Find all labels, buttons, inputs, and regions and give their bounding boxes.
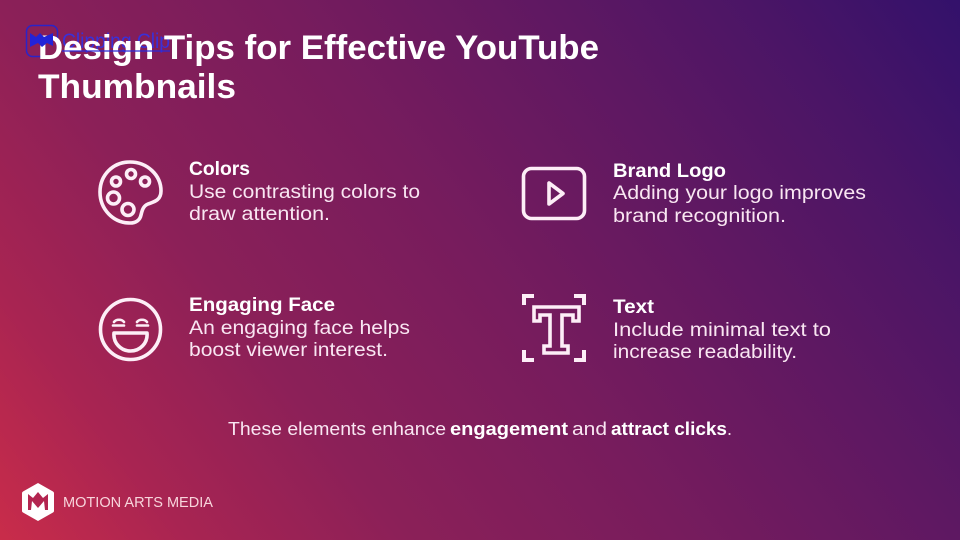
title: Thumbnails [38, 68, 236, 106]
text: colors: draw attention. [189, 204, 330, 225]
title [38, 29, 599, 106]
icon: hexagon crown [22, 483, 54, 521]
text: text [613, 297, 831, 363]
blue overlay logo link [26, 26, 170, 56]
text: brand logo: brand recognition. [613, 206, 786, 227]
closing statement: These elements enhance [228, 419, 446, 439]
icon: palette [100, 162, 161, 223]
text: colors: Use contrasting colors to [189, 182, 420, 203]
text: engaging face: boost viewer interest. [189, 340, 388, 361]
text: text: Include minimal text to [613, 320, 831, 341]
text: text: increase readability. [613, 342, 797, 363]
text: colors: Colors [189, 159, 250, 180]
text: engaging face [189, 295, 410, 361]
footer brand name: MOTION ARTS MEDIA [63, 494, 213, 511]
icon: text frame [524, 296, 584, 360]
blue logo mark and underline [30, 33, 170, 51]
footer logo [22, 483, 213, 521]
closing statement: and [572, 419, 607, 439]
text: brand logo [613, 161, 866, 227]
title: Design Tips for Effective YouTube [38, 29, 599, 67]
closing statement [228, 419, 732, 439]
text: text: Text [613, 297, 655, 318]
icon: play button [524, 168, 584, 218]
blue overlay logo link: Clipping Clip [62, 30, 170, 53]
closing statement: engagement [450, 419, 568, 439]
item: engaging face [100, 295, 410, 361]
icon: laughing face [100, 300, 160, 360]
text: engaging face: Engaging Face [189, 295, 335, 316]
text: engaging face: An engaging face helps [189, 318, 410, 339]
text: brand logo: Brand Logo [613, 161, 726, 182]
item: brand logo [524, 161, 866, 227]
closing statement: attract clicks [611, 419, 727, 439]
item: colors [100, 159, 420, 225]
text: brand logo: Adding your logo improves [613, 183, 866, 204]
item: text [524, 296, 831, 363]
closing statement: . [727, 419, 732, 439]
text: colors [189, 159, 420, 225]
